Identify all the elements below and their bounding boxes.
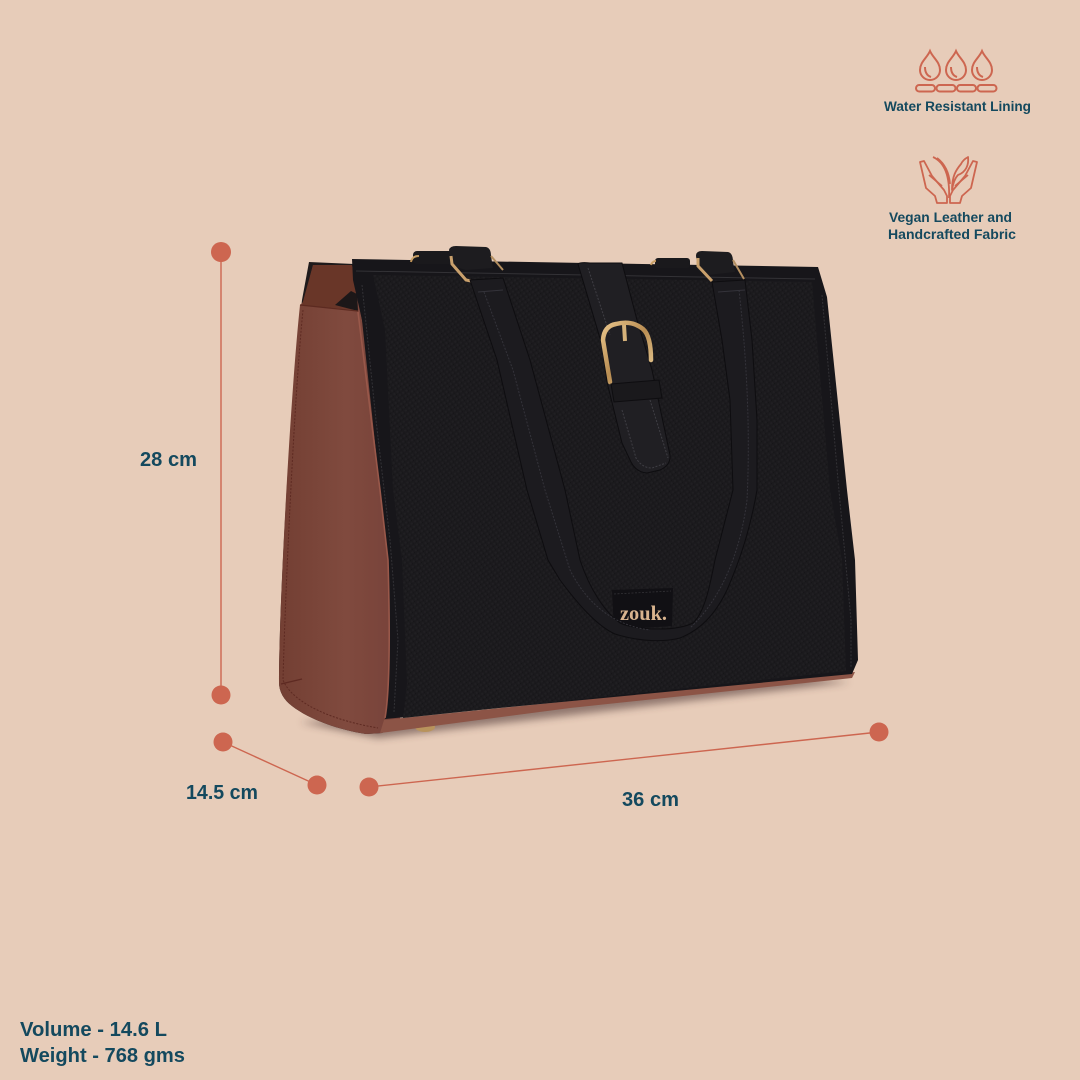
depth dimension: 14.5 cm xyxy=(186,782,258,804)
feature: vegan leather and handcrafted fabric: Handcrafted Fabric xyxy=(888,227,1017,242)
feet xyxy=(415,679,794,732)
product photo: handbag xyxy=(279,246,858,738)
width dimension: 36 cm xyxy=(622,789,679,811)
brand patch and logo xyxy=(612,588,673,630)
rear loops and rings xyxy=(411,246,744,281)
front panel: black leather border xyxy=(352,259,858,719)
buckle keeper xyxy=(611,380,662,402)
buckle xyxy=(603,323,651,382)
specs: volume and weight xyxy=(20,1019,185,1067)
brown edge along gusset xyxy=(358,312,389,718)
label: Water Resistant Lining xyxy=(884,99,1031,114)
feature: vegan leather and handcrafted fabric xyxy=(888,157,1017,242)
icon: water drops xyxy=(916,51,996,92)
shoulder strap xyxy=(470,278,757,641)
front panel: woven canvas xyxy=(373,275,846,718)
feature: water resistant lining xyxy=(884,51,1031,114)
bottom trim xyxy=(380,672,855,733)
buckle pin xyxy=(624,325,625,341)
ground shadow xyxy=(300,676,850,738)
label: Vegan Leather and xyxy=(889,210,1012,225)
side panel: brown gusset xyxy=(279,262,400,734)
width dimension xyxy=(360,722,888,811)
border stitching xyxy=(356,271,851,712)
depth dimension xyxy=(186,732,326,804)
specs: volume and weight: Weight - 768 gms xyxy=(20,1045,185,1067)
specs: volume and weight: Volume - 14.6 L xyxy=(20,1019,167,1041)
height dimension: 28 cm xyxy=(140,449,197,471)
icon: hands holding plant xyxy=(920,157,977,203)
brand patch and logo: zouk. xyxy=(620,601,667,625)
buckle strap xyxy=(578,263,670,473)
height dimension xyxy=(140,242,231,704)
